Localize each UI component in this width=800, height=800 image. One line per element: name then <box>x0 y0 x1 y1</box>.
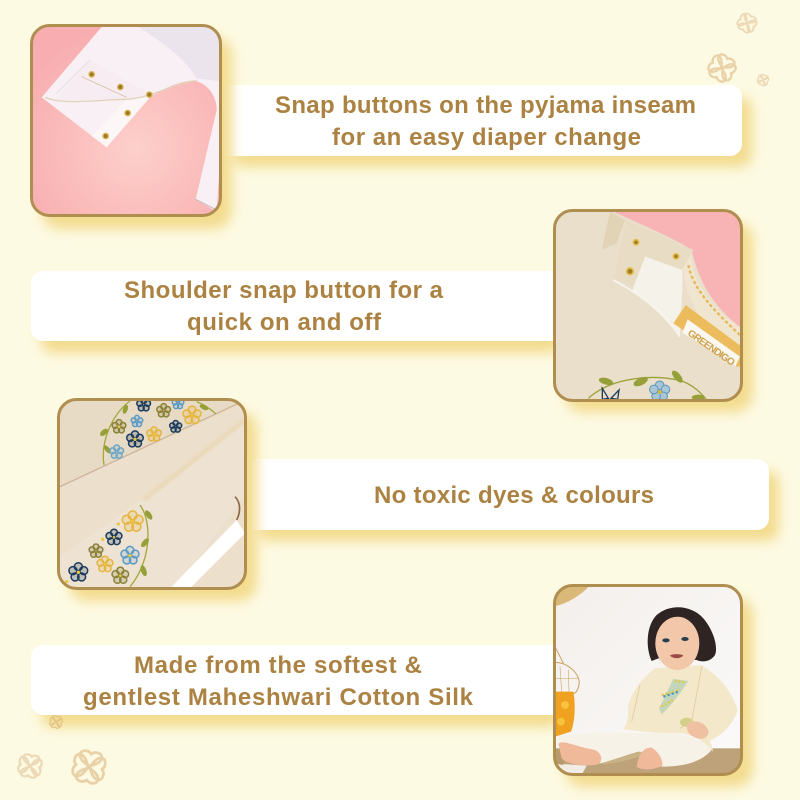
icon: clover bottom left <box>17 753 43 779</box>
panel: Maheshwari cotton silk <box>31 583 753 787</box>
panel: shoulder snap button <box>31 209 753 412</box>
caption: quick on and off <box>187 309 382 336</box>
caption <box>83 652 474 711</box>
text bar shadow <box>41 657 561 727</box>
text bar <box>247 459 769 530</box>
garment label <box>673 305 742 367</box>
trousers <box>555 732 712 767</box>
photo shadow <box>69 411 257 601</box>
photo: white pyjama on pink <box>30 24 223 216</box>
stitches <box>688 265 740 335</box>
embroidery vine <box>588 377 707 400</box>
text bar <box>31 271 553 341</box>
caption: gentlest Maheshwari Cotton Silk <box>83 684 474 711</box>
caption: Made from the softest & <box>134 652 422 679</box>
photo: seated baby <box>553 583 743 776</box>
photo shadow <box>565 222 753 412</box>
icon: clover top right <box>735 11 759 35</box>
photo shadow <box>565 597 753 787</box>
face <box>655 617 699 670</box>
feet <box>558 742 601 765</box>
panel: no toxic dyes <box>57 397 779 601</box>
photo: kurta shoulder <box>553 209 743 401</box>
caption: Snap buttons on the pyjama inseam <box>275 92 696 119</box>
text bar <box>222 85 742 156</box>
photo shadow <box>42 37 232 229</box>
kurta embroidery <box>659 679 688 714</box>
fringe <box>656 616 684 638</box>
hair <box>648 607 716 661</box>
floor mat <box>553 748 743 775</box>
icon: clover large bottom <box>71 749 107 785</box>
caption <box>275 92 696 151</box>
caption: Shoulder snap button for a <box>124 277 444 304</box>
snap buttons <box>89 72 152 139</box>
mouth <box>670 654 683 658</box>
photo frame <box>554 586 742 774</box>
snap buttons <box>627 240 679 275</box>
caption: for an easy diaper change <box>332 124 641 151</box>
icon: clover large top right <box>705 51 739 85</box>
lantern and marigolds <box>555 662 579 694</box>
photo: kurta shoulder: GREENDIGO <box>685 328 737 369</box>
text bar shadow <box>41 283 561 353</box>
text bar shadow <box>232 97 752 167</box>
photo frame <box>58 400 246 588</box>
kurta <box>623 665 738 752</box>
panel: snap buttons on pyjama inseam <box>30 24 752 229</box>
vines <box>103 401 216 587</box>
drape <box>556 587 588 606</box>
photo frame <box>554 210 742 400</box>
icon: clover small bottom left <box>49 715 63 729</box>
hands <box>686 721 708 739</box>
caption: No toxic dyes & colours <box>374 482 654 509</box>
caption <box>124 277 444 336</box>
photo frame <box>32 26 220 216</box>
photo: embroidered fabric <box>57 397 247 590</box>
eyes <box>662 638 670 642</box>
text bar <box>31 645 553 715</box>
embroidered flowers <box>69 397 201 583</box>
icon: clover small top right <box>756 73 770 87</box>
text bar shadow <box>257 471 779 541</box>
